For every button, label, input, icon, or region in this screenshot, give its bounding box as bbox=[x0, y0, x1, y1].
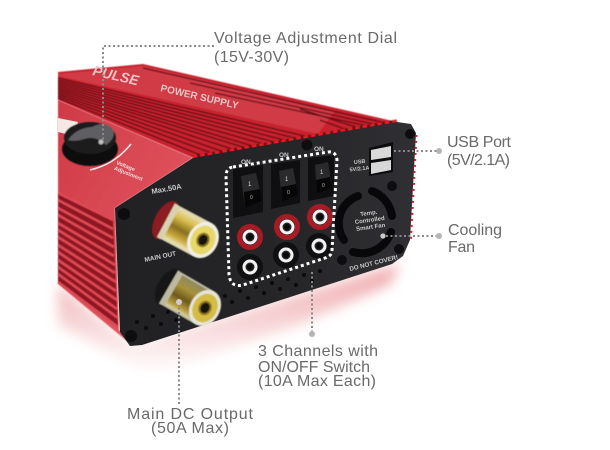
main output bottom connector bbox=[149, 264, 228, 333]
voltage scale arc bbox=[90, 144, 131, 170]
callout: cooling fan bbox=[380, 222, 502, 256]
switch 3: 1 bbox=[320, 170, 324, 176]
label: USB port: USB Port bbox=[447, 134, 512, 151]
cooling fan bbox=[339, 191, 399, 273]
switch ON labels bbox=[241, 146, 324, 166]
icon: voltage dial bbox=[62, 122, 118, 166]
label: max 50A: Max.50A bbox=[151, 182, 183, 196]
fan text: Smart Fan bbox=[356, 223, 386, 233]
label: voltage dial: (15V-30V) bbox=[214, 49, 289, 66]
callout: main DC output bbox=[127, 299, 254, 437]
do not cover warning: DO NOT COVER! bbox=[349, 254, 399, 273]
panel right edge ticks bbox=[411, 135, 416, 240]
top face with cooling fins bbox=[58, 64, 397, 158]
black sockets bbox=[240, 236, 330, 278]
fan grille bbox=[339, 191, 392, 253]
channel sockets bbox=[240, 206, 330, 278]
label: main output: MAIN OUT bbox=[144, 250, 177, 264]
callout: channels bbox=[258, 272, 378, 390]
callout: voltage dial bbox=[103, 30, 397, 140]
power supply device bbox=[58, 62, 416, 346]
label: voltage dial: Voltage Adjustment Dial bbox=[214, 30, 397, 47]
panel screws bbox=[118, 129, 415, 342]
label: channels: (10A Max Each) bbox=[258, 373, 376, 390]
switch ON labels: ON bbox=[279, 152, 289, 159]
label: main DC output: (50A Max) bbox=[151, 420, 229, 437]
switch 1: 1 bbox=[248, 182, 252, 188]
voltage scale label: Voltage bbox=[115, 160, 136, 173]
switch 2: 1 bbox=[285, 177, 289, 183]
switch ON labels: ON bbox=[314, 146, 324, 153]
switch ON labels: ON bbox=[241, 159, 251, 166]
switch 2: 0 bbox=[287, 190, 290, 196]
USB label: 5V/2.1A bbox=[349, 165, 370, 173]
label: USB port: (5V/2.1A) bbox=[447, 152, 510, 169]
top label: brand: PULSE bbox=[91, 62, 141, 89]
device reflection bbox=[58, 264, 400, 375]
label: channels: 3 Channels with bbox=[258, 343, 378, 360]
fan text: Controlled bbox=[355, 216, 385, 226]
label: cooling fan: Fan bbox=[448, 239, 475, 256]
label: cooling fan: Cooling bbox=[448, 222, 502, 239]
ventilation holes bbox=[135, 269, 322, 330]
callout: USB port bbox=[394, 134, 512, 169]
USB ports bbox=[369, 142, 393, 176]
red side face bbox=[58, 100, 193, 346]
label: main DC output: Main DC Output bbox=[127, 406, 254, 423]
label: channels: ON/OFF Switch bbox=[258, 359, 370, 376]
main output top connector bbox=[146, 197, 226, 266]
switch 2 bbox=[271, 160, 300, 209]
top label: power supply: POWER SUPPLY bbox=[159, 83, 240, 112]
dotted highlight around channels bbox=[226, 152, 337, 286]
USB label: USB bbox=[354, 159, 366, 166]
side display window bbox=[58, 118, 78, 136]
red sockets bbox=[240, 206, 330, 248]
switch 3: 0 bbox=[322, 183, 325, 189]
voltage scale label: Adjustment bbox=[113, 166, 143, 183]
switch 3 bbox=[308, 155, 334, 201]
black front panel bbox=[115, 122, 416, 346]
switch 1 bbox=[233, 165, 263, 218]
switch 1: 0 bbox=[250, 195, 253, 201]
fan text: Temp. bbox=[360, 210, 378, 218]
channel switches bbox=[233, 155, 334, 218]
